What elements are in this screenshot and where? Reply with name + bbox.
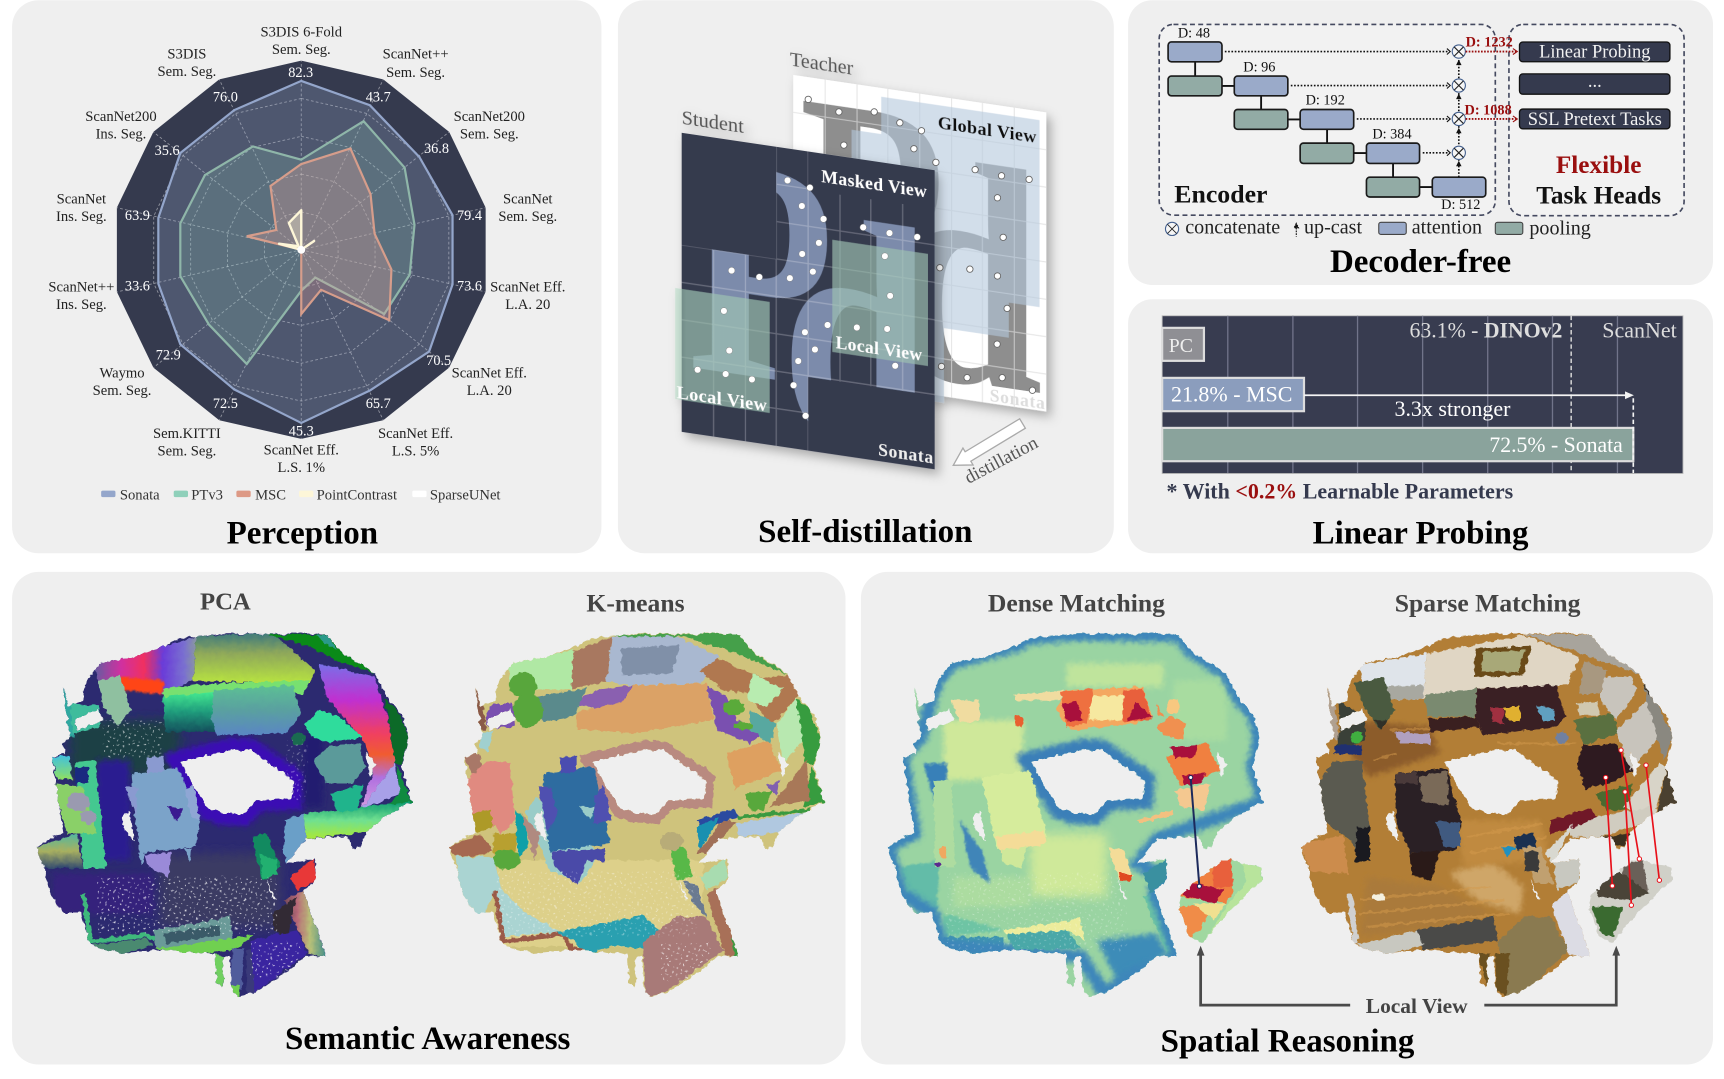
radar axis labels: L.A. 20 <box>505 297 550 313</box>
point cloud: PCA <box>30 627 420 1004</box>
heading: Decoder-free: Decoder-free <box>1330 244 1511 280</box>
heading: Perception: Perception <box>227 515 378 551</box>
heading: Sparse Matching: Sparse Matching <box>1395 589 1581 618</box>
encoder connectors <box>1195 62 1433 187</box>
radar axis labels: Sem.KITTI <box>153 426 221 442</box>
radar values: 70.5 <box>426 353 451 369</box>
red dimension labels <box>1465 34 1513 119</box>
arrow: distillation <box>953 419 1025 465</box>
series: PTv3 <box>180 121 415 364</box>
label: Sonata (teacher): Sonata <box>990 385 1045 413</box>
radar axis labels: L.S. 1% <box>278 460 325 476</box>
radar axis labels: ScanNet <box>503 192 553 208</box>
panel: linear probing <box>1128 299 1713 553</box>
label: Sonata (student): Sonata <box>878 440 934 468</box>
heading: PCA: PCA <box>200 588 251 615</box>
radar axis labels: ScanNet Eff. <box>378 426 453 442</box>
encoder blocks <box>1168 42 1486 197</box>
dimension labels: D: 48 <box>1178 26 1210 42</box>
radar axis labels: Sem. Seg. <box>498 209 557 225</box>
teacher plane <box>790 25 1046 464</box>
teacher plane: d <box>892 88 1043 463</box>
bar: PC <box>1162 328 1204 361</box>
dimension labels: D: 384 <box>1372 127 1412 143</box>
skip arrowheads <box>1447 49 1450 156</box>
decoder legend: up-cast <box>1304 216 1362 238</box>
radar values: 79.4 <box>457 208 482 224</box>
bar chart: 3.3x stronger <box>1394 396 1511 421</box>
match lines: sparse <box>1604 748 1662 907</box>
heading: Linear Probing: Linear Probing <box>1313 515 1529 551</box>
decoder legend <box>1165 216 1591 239</box>
radar values: 76.0 <box>213 89 238 105</box>
local view bracket: Local View <box>1366 994 1468 1018</box>
radar legend: Sonata <box>120 487 160 503</box>
radar legend: SparseUNet <box>430 487 500 503</box>
radar axis labels: Ins. Seg. <box>96 127 146 143</box>
radar axis labels: Sem. Seg. <box>460 127 519 143</box>
radar axis labels: ScanNet <box>57 192 106 208</box>
radar axis labels: Waymo <box>100 365 145 381</box>
radar axis labels: ScanNet Eff. <box>264 442 339 458</box>
radar axis labels: Ins. Seg. <box>56 209 107 225</box>
radar axis labels: Ins. Seg. <box>56 297 107 313</box>
radar axis labels: L.S. 5% <box>392 443 439 459</box>
teacher plane: P <box>799 26 945 400</box>
radar legend: PTv3 <box>191 487 223 503</box>
radar values: 63.9 <box>125 208 150 224</box>
radar axis labels: ScanNet++ <box>383 46 449 62</box>
label: distillation: distillation <box>961 432 1042 488</box>
radar axis labels: ScanNet200 <box>85 109 157 125</box>
local view fragment: dense <box>1178 858 1264 943</box>
radar values <box>125 65 482 440</box>
label: Flexible Task Heads: Flexible <box>1556 151 1641 179</box>
radar values: 72.5 <box>213 396 238 412</box>
panel: decoder-free <box>1128 0 1713 285</box>
heading: Self-distillation: Self-distillation <box>758 514 972 550</box>
radar values: 73.6 <box>457 278 482 294</box>
radar legend: MSC <box>255 487 286 503</box>
red feature routes <box>1466 52 1516 119</box>
label: Masked View: Masked View <box>821 166 927 202</box>
dimension labels: D: 96 <box>1243 60 1275 76</box>
decoder legend: concatenate <box>1185 216 1280 238</box>
student plane: d <box>781 146 931 521</box>
label: Local View right: Local View <box>836 332 922 365</box>
task heads: SSL Pretext Tasks <box>1528 109 1662 129</box>
radar chart <box>117 61 486 439</box>
radar axis labels <box>48 24 565 476</box>
radar axis labels: S3DIS 6-Fold <box>260 24 343 40</box>
panel: self-distillation <box>618 0 1114 553</box>
series: SparseUNet <box>297 246 305 254</box>
heading: Semantic Awareness: Semantic Awareness <box>285 1021 571 1057</box>
panel: semantic awareness <box>12 572 846 1065</box>
radar values: 35.6 <box>155 143 180 159</box>
bar chart: ScanNet <box>1602 318 1677 343</box>
bar: MSC <box>1162 378 1304 411</box>
radar values: 45.3 <box>289 424 314 440</box>
point cloud: dense matching <box>880 627 1270 1004</box>
dimension labels: D: 512 <box>1441 197 1480 213</box>
radar values: 36.8 <box>424 141 449 157</box>
radar axis labels: Sem. Seg. <box>93 383 151 399</box>
label: Flexible Task Heads: Task Heads <box>1536 182 1661 210</box>
student sample points <box>694 177 920 419</box>
label: Teacher: Teacher <box>790 49 854 80</box>
radar axis labels: ScanNet200 <box>454 109 525 125</box>
up-cast arrowheads <box>1456 60 1462 166</box>
bar: Sonata <box>1162 428 1633 461</box>
concatenate nodes <box>1452 45 1465 159</box>
DINOv2 marker <box>1570 316 1572 473</box>
radar values: 82.3 <box>288 65 313 81</box>
decoder legend: attention <box>1412 216 1482 238</box>
heading: Dense Matching: Dense Matching <box>988 589 1165 618</box>
task heads: Linear Probing <box>1539 41 1650 61</box>
footnote: * With <0.2% Learnable Parameters <box>1167 478 1514 503</box>
bar chart: PC <box>1169 335 1193 357</box>
task heads box <box>1509 24 1684 216</box>
label: Student: Student <box>682 107 744 138</box>
point cloud: sparse matching <box>1290 627 1680 1004</box>
radar axis labels: Sem. Seg. <box>157 64 216 80</box>
radar axis labels: ScanNet Eff. <box>490 280 565 296</box>
radar legend: PointContrast <box>317 487 397 503</box>
red dimension labels: D: 1232 <box>1466 34 1513 50</box>
arrow: 3.3x <box>1304 394 1627 396</box>
task heads: ... <box>1588 71 1602 91</box>
label: Global View: Global View <box>938 112 1037 147</box>
radar axis labels: L.A. 20 <box>467 383 512 399</box>
label: Local View left: Local View <box>677 382 768 416</box>
decoder legend: pooling <box>1529 217 1591 239</box>
label: Flexible Task Heads <box>1536 151 1661 210</box>
panel: spatial reasoning <box>861 572 1713 1065</box>
radar legend <box>101 487 500 503</box>
series: PointContrast <box>279 210 314 250</box>
skip connections <box>1225 52 1459 177</box>
radar values: 33.6 <box>125 278 150 294</box>
radar axis labels: Sem. Seg. <box>157 443 216 459</box>
dimension labels: D: 192 <box>1306 93 1345 109</box>
match line: dense <box>1189 776 1201 888</box>
bar chart: 21.8% - MSC <box>1171 382 1292 407</box>
panel: perception <box>12 0 601 553</box>
heading: K-means: K-means <box>586 589 685 618</box>
local view bracket <box>1197 946 1620 1018</box>
student plane <box>675 82 935 521</box>
red dimension labels: D: 1088 <box>1465 103 1512 119</box>
radar axis labels: Sem. Seg. <box>272 42 331 58</box>
radar axis labels: S3DIS <box>167 46 206 62</box>
radar values: 43.7 <box>366 89 391 105</box>
task heads <box>1519 41 1670 129</box>
local view fragment: sparse <box>1588 860 1673 943</box>
radar axis labels: ScanNet++ <box>48 280 114 296</box>
dimension labels <box>1178 26 1480 213</box>
point cloud: K-means <box>440 627 830 1004</box>
student plane: P <box>688 84 834 458</box>
bar chart: 63.1% - DINOv2 <box>1410 319 1562 343</box>
radar values: 72.9 <box>156 348 181 364</box>
radar axis labels: Sem. Seg. <box>386 65 445 81</box>
radar axis labels: ScanNet Eff. <box>452 365 527 381</box>
teacher sample points <box>805 96 1036 393</box>
label: Encoder: Encoder <box>1174 180 1268 209</box>
series: MSC <box>247 148 391 320</box>
bar chart <box>1162 316 1683 474</box>
encoder box <box>1159 24 1495 215</box>
heading: Spatial Reasoning: Spatial Reasoning <box>1161 1023 1415 1059</box>
bar chart: 72.5% - Sonata <box>1489 433 1623 457</box>
red arrowheads <box>1513 49 1517 122</box>
series: Sonata <box>158 81 453 423</box>
radar values: 65.7 <box>366 396 391 412</box>
